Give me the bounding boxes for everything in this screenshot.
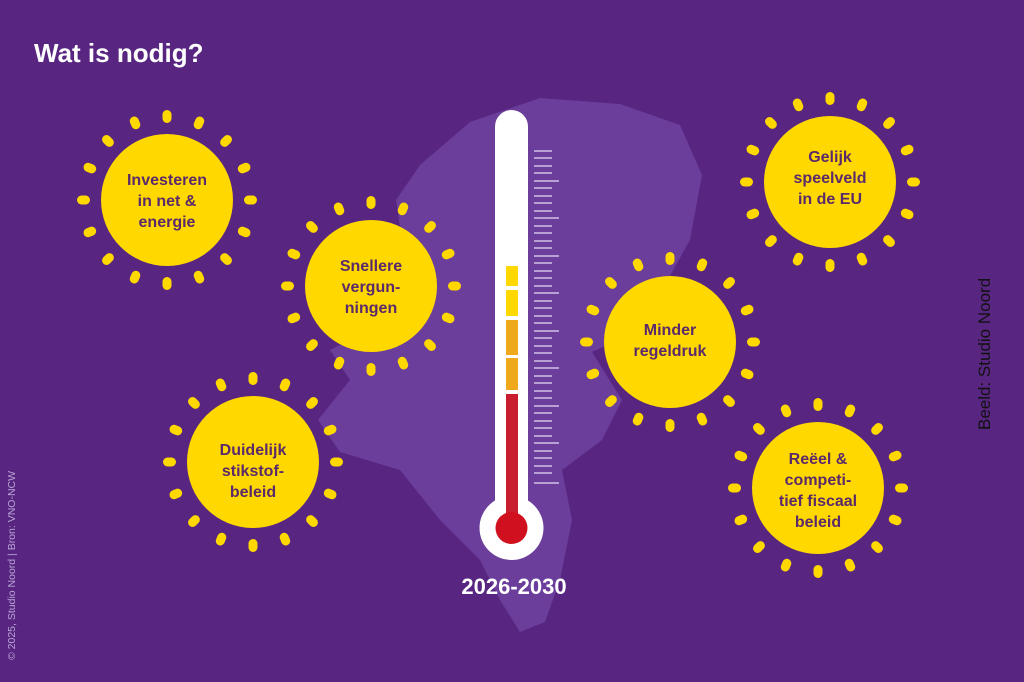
sun: Duidelijk stikstofbeleid: beleid [230,484,276,501]
thermometer [480,110,559,560]
label: 2026-2030: 2026-2030 [461,574,567,599]
sun: Investeren in net & energie [77,110,257,290]
sun: Reëel & competitief fiscaal beleid: competi- [785,472,851,489]
sun: Reëel & competitief fiscaal beleid: tief fiscaal [779,493,857,510]
sun: Duidelijk stikstofbeleid: Duidelijk [220,442,286,459]
sun: Snellere vergunningen: Snellere [340,258,402,275]
sun: Gelijk speelveld in de EU: speelveld [794,170,866,187]
sun: Gelijk speelveld in de EU: Gelijk [808,149,852,166]
sun: Snellere vergunningen: ningen [345,300,397,317]
sun: Snellere vergunningen [281,196,461,376]
sun: Gelijk speelveld in de EU: in de EU [798,191,862,208]
title: Wat is nodig? [34,38,203,68]
sun: Snellere vergunningen: vergun- [342,279,400,296]
sun: Gelijk speelveld in de EU [740,92,920,272]
sun: Duidelijk stikstofbeleid [163,372,343,552]
sun: Investeren in net & energie: Investeren [127,172,207,189]
map: Netherlands silhouette [318,98,702,632]
credit: Beeld Studio Noord: Beeld: Studio Noord [975,278,994,430]
sun: Investeren in net & energie: energie [139,214,196,231]
sun: Minder regeldruk: Minder [644,322,696,339]
sun: Reëel & competitief fiscaal beleid [728,398,908,578]
sun: Reëel & competitief fiscaal beleid: Reëel & [789,451,848,468]
sun: Reëel & competitief fiscaal beleid: beleid [795,514,841,531]
sun: Investeren in net & energie: in net & [138,193,197,210]
sun: Duidelijk stikstofbeleid: stikstof- [222,463,284,480]
credit: copyright: © 2025, Studio Noord | Bron: VNO-NCW [6,471,18,660]
sun: Minder regeldruk: regeldruk [634,343,707,360]
sun: Minder regeldruk [580,252,760,432]
